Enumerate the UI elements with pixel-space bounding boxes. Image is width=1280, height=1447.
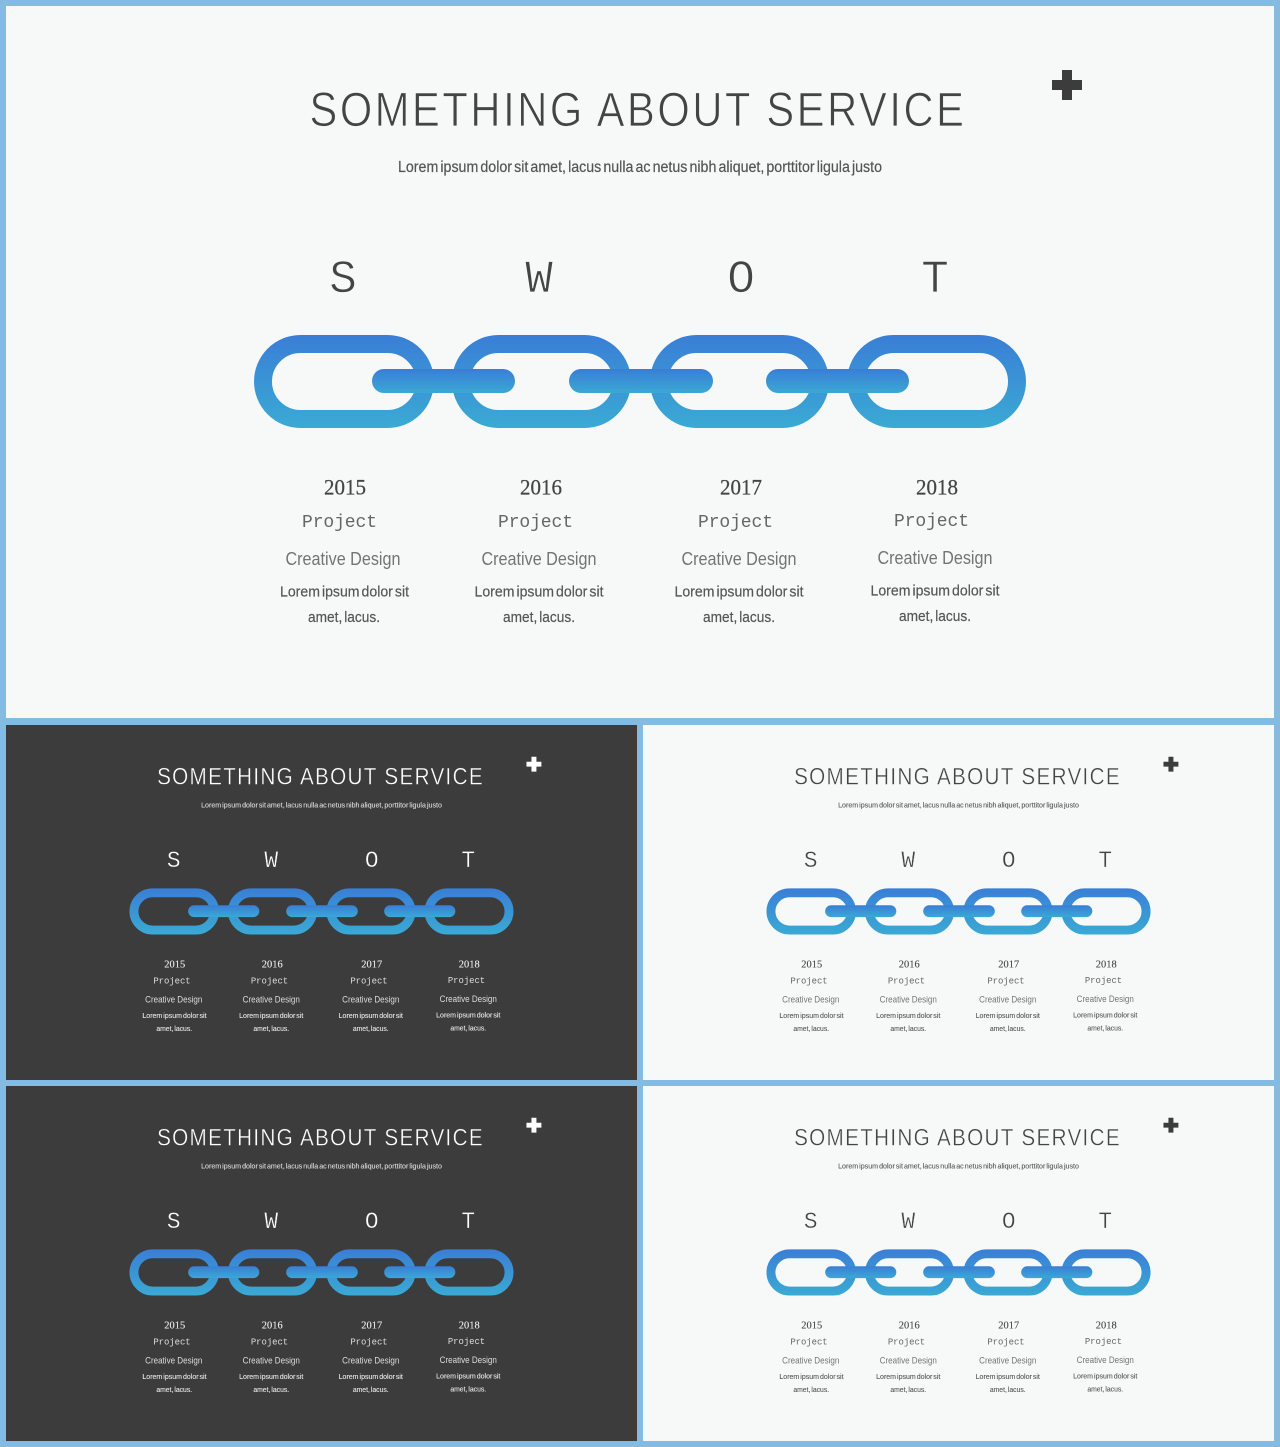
column: 2015: Creative Design bbox=[286, 548, 400, 569]
column: 2016: Lorem ipsum dolor sit bbox=[474, 584, 604, 600]
panel: light slide bottom right: Creative Design bbox=[880, 1356, 937, 1366]
panel: light slide bottom right: Creative Design bbox=[782, 1356, 839, 1366]
panel: light slide bottom right: 2017 bbox=[998, 1320, 1020, 1332]
panel: dark slide bottom left: 2015 bbox=[164, 1320, 186, 1332]
panel: dark slide bottom left: Lorem ipsum dolor sit bbox=[239, 1372, 304, 1381]
panel: light slide bottom right: W bbox=[901, 1209, 915, 1235]
panel: dark slide top left: Creative Design bbox=[342, 995, 399, 1005]
panel: light slide bottom right: Creative Design bbox=[1077, 1355, 1134, 1365]
SWOT letters: S bbox=[329, 254, 357, 306]
panel: light slide bottom right: SOMETHING ABOUT SERVICE bbox=[794, 1125, 1121, 1152]
column: 2018: Lorem ipsum dolor sit bbox=[870, 582, 1000, 600]
panel: dark slide top left: Creative Design bbox=[145, 995, 202, 1005]
panel: dark slide bottom left: Lorem ipsum dolor sit bbox=[142, 1372, 207, 1381]
panel: light slide top right: T bbox=[1098, 848, 1112, 874]
panel: light slide top right bbox=[643, 725, 1274, 1080]
column: 2017: Project bbox=[698, 513, 773, 533]
panel: dark slide top left: Project bbox=[153, 977, 191, 987]
column: 2017 bbox=[674, 474, 804, 626]
panel: dark slide bottom left: Lorem ipsum dolor sit amet, lacus nulla ac netus nibh aliquet, porttitor ligula justo bbox=[201, 1161, 442, 1170]
column: 2015: Lorem ipsum dolor sit bbox=[280, 584, 410, 600]
panel: light slide top right: Lorem ipsum dolor sit bbox=[976, 1011, 1041, 1020]
panel: light slide top right: Creative Design bbox=[979, 995, 1036, 1005]
column: 2017: Lorem ipsum dolor sit bbox=[674, 584, 804, 600]
column: 2018: Creative Design bbox=[878, 547, 992, 568]
panel: light slide bottom right: O bbox=[1002, 1209, 1016, 1235]
column: 2018: amet, lacus. bbox=[899, 608, 971, 625]
panel: light slide top right: amet, lacus. bbox=[890, 1024, 926, 1033]
panel: light slide top right: amet, lacus. bbox=[793, 1024, 829, 1033]
panel: dark slide top left: Project bbox=[448, 976, 485, 986]
panel: dark slide bottom left: SOMETHING ABOUT SERVICE bbox=[157, 1125, 484, 1152]
panel: dark slide bottom left: amet, lacus. bbox=[253, 1385, 289, 1394]
panel: dark slide bottom left: Creative Design bbox=[342, 1356, 399, 1366]
panel: light slide bottom right: amet, lacus. bbox=[793, 1385, 829, 1394]
panel: light slide bottom right: 2015 bbox=[801, 1320, 823, 1332]
SWOT letters: W bbox=[525, 254, 553, 306]
panel: dark slide bottom left: W bbox=[264, 1209, 278, 1235]
panel: main light slide bbox=[6, 6, 1274, 718]
panel: dark slide bottom left: Project bbox=[251, 1338, 288, 1348]
column: 2017: Creative Design bbox=[682, 548, 796, 569]
panel: light slide bottom right: Project bbox=[987, 1338, 1025, 1348]
panel: light slide top right: Lorem ipsum dolor sit bbox=[1073, 1011, 1138, 1020]
panel: dark slide top left: amet, lacus. bbox=[450, 1023, 486, 1032]
panel: dark slide top left: W bbox=[264, 848, 278, 874]
title: SOMETHING ABOUT SERVICE bbox=[310, 84, 966, 137]
panel: dark slide bottom left: Lorem ipsum dolor sit bbox=[339, 1372, 404, 1381]
panel: dark slide bottom left: Lorem ipsum dolor sit bbox=[436, 1372, 501, 1381]
column: 2015: amet, lacus. bbox=[308, 609, 380, 626]
panel: light slide top right: Creative Design bbox=[1077, 994, 1134, 1004]
column: 2016: Creative Design bbox=[482, 548, 596, 569]
panel: light slide top right: Project bbox=[790, 977, 828, 987]
panel: light slide top right: Lorem ipsum dolor sit bbox=[779, 1011, 844, 1020]
panel: light slide bottom right: Project bbox=[888, 1338, 925, 1348]
panel: dark slide top left: amet, lacus. bbox=[253, 1024, 289, 1033]
panel: light slide top right: Lorem ipsum dolor sit amet, lacus nulla ac netus nibh aliquet, porttitor ligula justo bbox=[838, 800, 1079, 809]
panel: light slide bottom right: Lorem ipsum dolor sit amet, lacus nulla ac netus nibh aliquet, porttitor ligula justo bbox=[838, 1161, 1079, 1170]
panel: dark slide top left: 2016 bbox=[262, 959, 283, 971]
panel: dark slide top left: Project bbox=[350, 977, 388, 987]
panel: light slide top right: S bbox=[804, 848, 818, 874]
SWOT letters: O bbox=[727, 254, 755, 306]
SWOT letters bbox=[329, 254, 949, 306]
panel: light slide bottom right: amet, lacus. bbox=[1087, 1384, 1123, 1393]
panel: light slide top right: Creative Design bbox=[880, 995, 937, 1005]
panel: dark slide bottom left: Creative Design bbox=[243, 1356, 300, 1366]
panel: dark slide top left bbox=[6, 725, 637, 1080]
panel: light slide top right: 2017 bbox=[998, 959, 1020, 971]
panel: dark slide top left: SOMETHING ABOUT SERVICE bbox=[157, 764, 484, 791]
panel: dark slide top left: O bbox=[365, 848, 379, 874]
panel: light slide top right: 2015 bbox=[801, 959, 823, 971]
panel: light slide bottom right: Lorem ipsum dolor sit bbox=[1073, 1372, 1138, 1381]
panel: light slide bottom right: Project bbox=[790, 1338, 828, 1348]
panel: light slide top right: Project bbox=[987, 977, 1025, 987]
panel: dark slide top left: S bbox=[167, 848, 181, 874]
panel: light slide bottom right: Creative Design bbox=[979, 1356, 1036, 1366]
panel: dark slide top left: Lorem ipsum dolor sit bbox=[239, 1011, 304, 1020]
panel: light slide top right: Creative Design bbox=[782, 995, 839, 1005]
panel: light slide top right: amet, lacus. bbox=[1087, 1023, 1123, 1032]
panel: light slide top right: Lorem ipsum dolor sit bbox=[876, 1011, 941, 1020]
panel: dark slide bottom left: O bbox=[365, 1209, 379, 1235]
panel: light slide bottom right: Lorem ipsum dolor sit bbox=[976, 1372, 1041, 1381]
column: 2015: Project bbox=[302, 513, 377, 533]
panel: dark slide bottom left bbox=[6, 1086, 637, 1441]
panel: dark slide bottom left: 2018 bbox=[459, 1320, 480, 1332]
panel: dark slide bottom left: Project bbox=[350, 1338, 388, 1348]
panel: dark slide top left: Creative Design bbox=[243, 995, 300, 1005]
column: 2016: Project bbox=[498, 513, 573, 533]
panel: dark slide bottom left: amet, lacus. bbox=[353, 1385, 389, 1394]
column: 2018: 2018 bbox=[916, 474, 958, 500]
SWOT letters: T bbox=[921, 254, 949, 306]
panel: dark slide bottom left: Creative Design bbox=[145, 1356, 202, 1366]
panel: light slide top right: 2016 bbox=[899, 959, 920, 971]
panel: light slide top right: amet, lacus. bbox=[990, 1024, 1026, 1033]
panel: dark slide top left: 2015 bbox=[164, 959, 186, 971]
column: 2018 bbox=[870, 474, 1000, 625]
column: 2017: 2017 bbox=[720, 474, 762, 500]
panel: dark slide bottom left: Project bbox=[153, 1338, 191, 1348]
panel: light slide bottom right: 2018 bbox=[1096, 1320, 1117, 1332]
panel: light slide top right: O bbox=[1002, 848, 1016, 874]
column: 2016: amet, lacus. bbox=[503, 609, 575, 626]
panel: light slide bottom right: Project bbox=[1085, 1337, 1122, 1347]
chain graphic bbox=[263, 344, 1017, 419]
panel: dark slide bottom left: S bbox=[167, 1209, 181, 1235]
panel: light slide bottom right: amet, lacus. bbox=[990, 1385, 1026, 1394]
panel: dark slide bottom left: T bbox=[461, 1209, 475, 1235]
panel: light slide bottom right: 2016 bbox=[899, 1320, 920, 1332]
panel: dark slide bottom left: Creative Design bbox=[440, 1355, 497, 1365]
panel: dark slide top left: Lorem ipsum dolor sit amet, lacus nulla ac netus nibh aliquet, porttitor ligula justo bbox=[201, 800, 442, 809]
panel: dark slide top left: amet, lacus. bbox=[156, 1024, 192, 1033]
column: 2018: Project bbox=[894, 512, 969, 532]
panel: dark slide bottom left: amet, lacus. bbox=[156, 1385, 192, 1394]
subtitle: Lorem ipsum dolor sit amet, lacus nulla ac netus nibh aliquet, porttitor ligula justo bbox=[398, 159, 882, 176]
panel: light slide top right: W bbox=[901, 848, 915, 874]
panel: dark slide bottom left: 2017 bbox=[361, 1320, 383, 1332]
panel: light slide top right: SOMETHING ABOUT SERVICE bbox=[794, 764, 1121, 791]
panel: light slide bottom right: T bbox=[1098, 1209, 1112, 1235]
column: 2015: 2015 bbox=[324, 474, 366, 500]
panel: dark slide top left: amet, lacus. bbox=[353, 1024, 389, 1033]
column: 2017: amet, lacus. bbox=[703, 609, 775, 626]
panel: dark slide top left: Creative Design bbox=[440, 994, 497, 1004]
panel: light slide bottom right: Lorem ipsum dolor sit bbox=[876, 1372, 941, 1381]
panel: dark slide top left: Lorem ipsum dolor sit bbox=[339, 1011, 404, 1020]
panel: light slide bottom right bbox=[643, 1086, 1274, 1441]
panel: dark slide top left: 2017 bbox=[361, 959, 383, 971]
column: 2015 bbox=[280, 474, 410, 626]
panel: dark slide bottom left: Project bbox=[448, 1337, 485, 1347]
panel: dark slide top left: T bbox=[461, 848, 475, 874]
column: 2016: 2016 bbox=[520, 474, 562, 500]
panel: light slide bottom right: amet, lacus. bbox=[890, 1385, 926, 1394]
panel: dark slide top left: 2018 bbox=[459, 959, 480, 971]
panel: light slide top right: Project bbox=[888, 977, 925, 987]
panel: light slide top right: Project bbox=[1085, 976, 1122, 986]
panel: light slide bottom right: Lorem ipsum dolor sit bbox=[779, 1372, 844, 1381]
panel: dark slide top left: Project bbox=[251, 977, 288, 987]
panel: dark slide bottom left: amet, lacus. bbox=[450, 1384, 486, 1393]
panel: dark slide top left: Lorem ipsum dolor sit bbox=[142, 1011, 207, 1020]
column: 2016 bbox=[474, 474, 604, 626]
panel: light slide bottom right: S bbox=[804, 1209, 818, 1235]
panel: light slide top right: 2018 bbox=[1096, 959, 1117, 971]
panel: dark slide top left: Lorem ipsum dolor sit bbox=[436, 1011, 501, 1020]
panel: dark slide bottom left: 2016 bbox=[262, 1320, 283, 1332]
icon: plus bbox=[1052, 70, 1082, 100]
